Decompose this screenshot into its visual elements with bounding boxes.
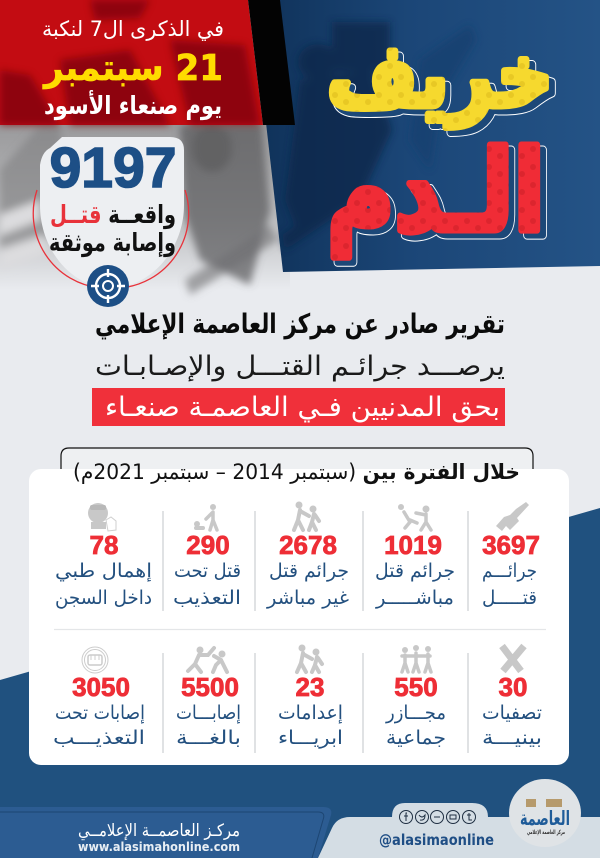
- icon: two figures: [297, 644, 322, 672]
- stat: severe injuries: [176, 646, 241, 749]
- icon: crossed rifles: [502, 646, 524, 671]
- logo badge: مركز العاصمة الإعلامي: [527, 829, 565, 836]
- stat: extrajudicial killings: 30: [499, 672, 527, 702]
- banner date: 21 September: 21 سبتمبر: [42, 48, 223, 89]
- badge text line 2: وإصابة موثقة: [49, 228, 176, 258]
- title word: blood: الـدم: [327, 127, 545, 258]
- stat: indirect killings: [266, 502, 349, 609]
- stat: medical neglect: [55, 503, 152, 609]
- stat: death under torture: التعذيب: [173, 587, 241, 609]
- logo badge: العاصمة: [520, 806, 570, 830]
- period box outline: [61, 448, 533, 470]
- report line 2: يرصـــد جرائـم القتـــل والإصـابـات: [95, 351, 505, 382]
- report line 1: تقرير صادر عن مركز العاصمة الإعلامي: [95, 309, 505, 340]
- icon: rifle: [496, 502, 529, 531]
- badge: 9197 documented: [33, 136, 189, 307]
- stat: extrajudicial killings: تصفيات: [482, 702, 542, 724]
- banner subheading: black day: يوم صنعاء الأسود: [44, 90, 222, 121]
- red banner: [0, 0, 263, 125]
- stat: massacres: [385, 645, 446, 749]
- stat: injuries under torture: 3050: [72, 672, 130, 702]
- stat: executions: ابريـــاء: [278, 727, 343, 749]
- footer right panel: [318, 803, 600, 858]
- title word: autumn: خريف: [327, 24, 553, 127]
- panel: statistics card: [29, 460, 569, 765]
- stat: injuries under torture: التعذيـــب: [53, 727, 145, 749]
- title word: autumn: خريف: [331, 29, 559, 132]
- stat: injuries under torture: [53, 647, 145, 749]
- grayscale fighters photo: [0, 124, 290, 295]
- stat: medical neglect: 78: [90, 530, 118, 560]
- social handle: @alasimaonline: [379, 831, 494, 849]
- logo badge: [509, 779, 581, 847]
- stat: indirect killings: جرائم قتل: [269, 560, 349, 582]
- footer left panel: [0, 807, 331, 858]
- stat: medical neglect: إهمال طبي: [55, 560, 152, 583]
- stat: direct killings: 1019: [384, 530, 442, 560]
- stat: indirect killings: 2678: [279, 530, 337, 560]
- stat: killing crimes: قتـــــل: [482, 587, 537, 609]
- icon: standing over kneeling figure: [194, 504, 217, 530]
- icon: patient and hand: [88, 503, 116, 531]
- footer website: www.alasimahonline.com: [78, 839, 240, 854]
- stat: death under torture: 290: [186, 530, 230, 560]
- icon: two figures: [294, 502, 319, 530]
- icon: kicking figures: [398, 504, 431, 530]
- stat: extrajudicial killings: بينيـــة: [482, 727, 542, 749]
- stat: direct killings: مباشـــــر: [375, 587, 454, 609]
- badge text line 1: واقعــة قتــل: [50, 200, 176, 230]
- stat: massacres: جماعية: [386, 727, 446, 749]
- stat: severe injuries: إصابـــات: [176, 702, 241, 725]
- stat: direct killings: جرائم قتل: [375, 560, 455, 582]
- stat: massacres: مجـــازر: [385, 702, 446, 724]
- title word: blood: الـدم: [331, 132, 551, 263]
- icon: target: [87, 265, 129, 307]
- stat: extrajudicial killings: [482, 646, 542, 749]
- stat: killing crimes: جرائـــم: [482, 560, 537, 582]
- stat: executions: إعدامات: [278, 702, 343, 725]
- stat: executions: [278, 644, 343, 749]
- stat: severe injuries: بالغـــة: [176, 727, 241, 749]
- stat: executions: 23: [296, 672, 324, 702]
- icon: fist in circle: [82, 647, 108, 673]
- stat: direct killings: [375, 504, 455, 609]
- footer organisation name: مركـز العاصمــة الإعلامــي: [78, 821, 240, 841]
- stat: killing crimes: [482, 502, 540, 609]
- red highlight line: بحق المدنيين فـي العاصمـة صنعـاء: [105, 392, 500, 423]
- lower blue background: [0, 508, 600, 858]
- banner heading: anniversary: في الذكرى ال7 لنكبة: [42, 17, 224, 41]
- badge number: 9197: [50, 136, 176, 200]
- title word: autumn: خريف: [331, 29, 559, 132]
- social icons: [400, 810, 476, 824]
- stat: death under torture: [173, 504, 241, 609]
- stat: death under torture: قتل تحت: [174, 560, 241, 582]
- title word: blood: الـدم: [331, 132, 551, 263]
- icon: attacker and victim: [188, 646, 227, 672]
- period heading: خلال الفترة بين (سبتمبر 2014 – سبتمبر 2021م): [73, 460, 520, 484]
- stat: medical neglect: داخل السجن: [55, 587, 152, 609]
- stat: killing crimes: 3697: [482, 530, 540, 560]
- stat: injuries under torture: إصابات تحت: [55, 702, 145, 725]
- blue title panel: [252, 0, 600, 272]
- black strip: [248, 0, 295, 125]
- stat: severe injuries: 5500: [181, 672, 239, 702]
- icon: group of figures: [402, 645, 431, 672]
- stat: indirect killings: غير مباشر: [266, 587, 349, 609]
- stat: massacres: 550: [394, 672, 438, 702]
